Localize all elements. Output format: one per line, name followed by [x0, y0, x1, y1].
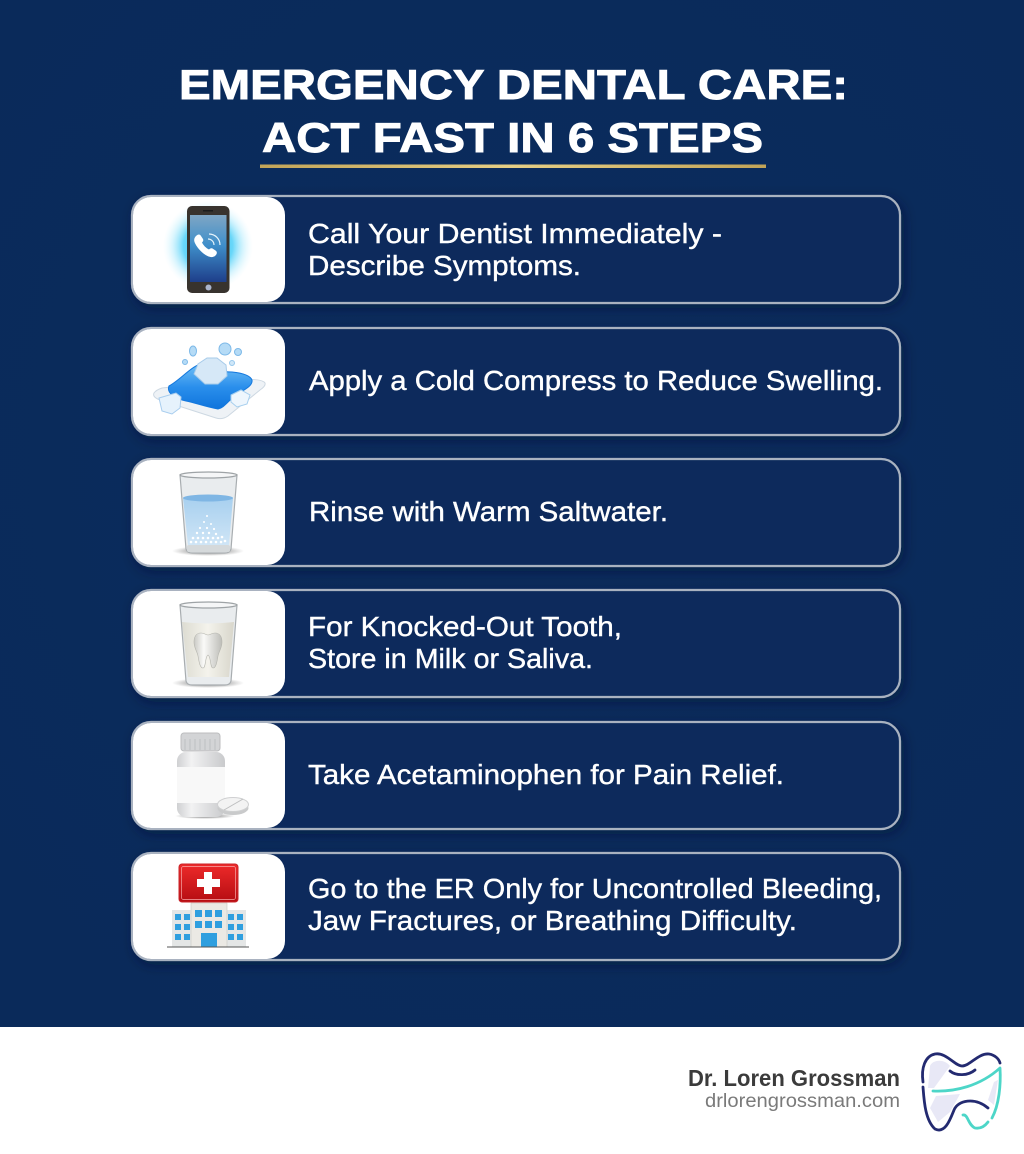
title: ACT FAST IN 6 STEPS	[262, 114, 763, 161]
step 3 icon panel	[133, 460, 285, 565]
icon: glass of saltwater	[172, 472, 244, 556]
footer brand name: Dr. Loren Grossman	[688, 1065, 900, 1091]
step 5 text: Take Acetaminophen for Pain Relief.	[308, 759, 784, 790]
step 2 icon panel	[133, 329, 285, 434]
title: EMERGENCY DENTAL CARE:	[179, 61, 848, 108]
step 4 card	[132, 590, 900, 697]
step 5 icon panel	[133, 723, 285, 828]
gold underline	[260, 164, 766, 168]
icon: cold compress	[154, 343, 265, 419]
step 3 card	[132, 459, 900, 566]
step 1 card	[132, 196, 900, 303]
step 1 text	[308, 218, 722, 281]
step 1 text: Call Your Dentist Immediately -	[308, 218, 722, 249]
logo: tooth	[922, 1054, 1000, 1130]
step 6 text: Jaw Fractures, or Breathing Difficulty.	[308, 905, 797, 936]
step 4 icon panel	[133, 591, 285, 696]
step 3 text: Rinse with Warm Saltwater.	[309, 496, 668, 527]
white footer band	[0, 1027, 1024, 1154]
step 6 text: Go to the ER Only for Uncontrolled Bleeding,	[308, 873, 882, 904]
salt particles	[190, 515, 226, 543]
step 4 text: For Knocked-Out Tooth,	[308, 611, 622, 642]
title	[179, 61, 848, 161]
step 2 card	[132, 328, 900, 435]
step 2 text: Apply a Cold Compress to Reduce Swelling.	[309, 365, 883, 396]
step 4 text	[308, 611, 622, 674]
icon: tooth in glass of milk	[172, 602, 244, 688]
step 1 text: Describe Symptoms.	[308, 250, 581, 281]
step 6 card	[132, 853, 900, 960]
step 1 icon panel	[133, 197, 285, 302]
step 4 text: Store in Milk or Saliva.	[308, 643, 593, 674]
icon: smartphone calling	[163, 201, 253, 293]
icon: hospital with red cross sign	[167, 864, 249, 948]
step 5 card	[132, 722, 900, 829]
footer website: drlorengrossman.com	[705, 1090, 900, 1112]
step 6 icon panel	[133, 854, 285, 959]
step 6 text	[308, 873, 882, 936]
icon: pill bottle and tablet	[175, 733, 248, 819]
